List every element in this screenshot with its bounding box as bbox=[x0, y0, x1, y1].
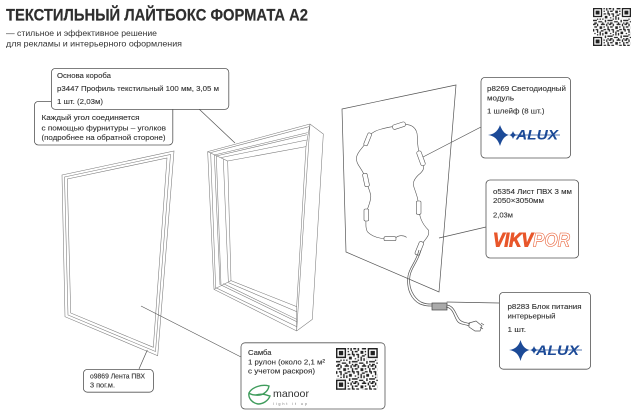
subtitle bbox=[6, 28, 182, 48]
panel: corner note bbox=[34, 101, 173, 145]
PVC tape frame bbox=[62, 151, 174, 356]
panel: Samba: Самба bbox=[248, 348, 272, 357]
panel: corner note: с помощью фурнитуры – уголков bbox=[42, 124, 166, 132]
panel: PVC tape label: о9869 Лента ПВХ bbox=[90, 372, 145, 380]
logo: ALUX: ALUX bbox=[515, 128, 559, 142]
panel: power supply: интерьерный bbox=[508, 312, 556, 320]
panel: PVC tape label: 3 пог.м. bbox=[90, 380, 115, 390]
panel: PVC sheet: о5354 Лист ПВХ 3 мм bbox=[493, 187, 572, 196]
power cable and supply bbox=[408, 250, 484, 331]
panel: LED module: модуль bbox=[487, 94, 514, 102]
LED chain bbox=[356, 121, 429, 256]
panel: box base: р3447 Профиль текстильный 100 мм, 3,05 м bbox=[57, 84, 219, 93]
icon: QR code samba bbox=[336, 348, 378, 390]
panel: Samba: 1 рулон (около 2,1 м² bbox=[248, 358, 325, 366]
panel: power supply bbox=[499, 292, 591, 369]
leader line: tape to label bbox=[139, 350, 147, 369]
leader line: samba to tape bbox=[141, 306, 241, 357]
subtitle: — стильное и эффективное решение bbox=[6, 28, 157, 38]
panel: box base: 1 шт. (2,03м) bbox=[57, 97, 103, 106]
panel: box base bbox=[51, 68, 229, 109]
panel: corner note: Каждый угол соединяется bbox=[42, 113, 140, 122]
profile box frame bbox=[208, 124, 323, 331]
leader lines: right labels bbox=[423, 127, 499, 303]
panel: PVC sheet: 2050×3050мм bbox=[493, 196, 544, 205]
title: ТЕКСТИЛЬНЫЙ ЛАЙТБОКС ФОРМАТА А2 bbox=[6, 6, 308, 25]
panel: PVC tape label bbox=[83, 369, 153, 392]
logo: Vikvpor: POR bbox=[533, 230, 570, 252]
panel: corner note: (подробнее на обратной стороне) bbox=[42, 133, 166, 142]
logo: Manoor: manoor bbox=[273, 388, 310, 400]
logo: Vikvpor: VIKV bbox=[493, 230, 534, 252]
panel: PVC sheet bbox=[486, 180, 579, 258]
panel: power supply: 1 шт. bbox=[508, 325, 526, 334]
subtitle: для рекламы и интерьерного оформления bbox=[6, 38, 182, 48]
panel: box base: Основа короба bbox=[57, 71, 112, 80]
logo: Manoor bbox=[249, 385, 310, 406]
logo: ALUX: ALUX bbox=[535, 343, 580, 358]
leader line: profile to frame bbox=[199, 109, 235, 143]
panel: LED module: 1 шлейф (8 шт.) bbox=[487, 106, 545, 116]
panel: PVC sheet: 2,03м bbox=[493, 210, 513, 220]
panel: Samba: с учетом раскроя) bbox=[248, 366, 315, 376]
panel: LED module bbox=[481, 77, 571, 158]
icon: QR code top right bbox=[593, 8, 631, 46]
panel: power supply: р8283 Блок питания bbox=[508, 302, 582, 311]
logo: Manoor: light it up bbox=[273, 402, 307, 406]
panel: LED module: р8269 Светодиодный bbox=[487, 84, 566, 93]
logo: Vikvpor bbox=[493, 230, 570, 252]
panel: Samba bbox=[241, 343, 385, 409]
panel: PVC sheet drawing bbox=[342, 85, 456, 292]
